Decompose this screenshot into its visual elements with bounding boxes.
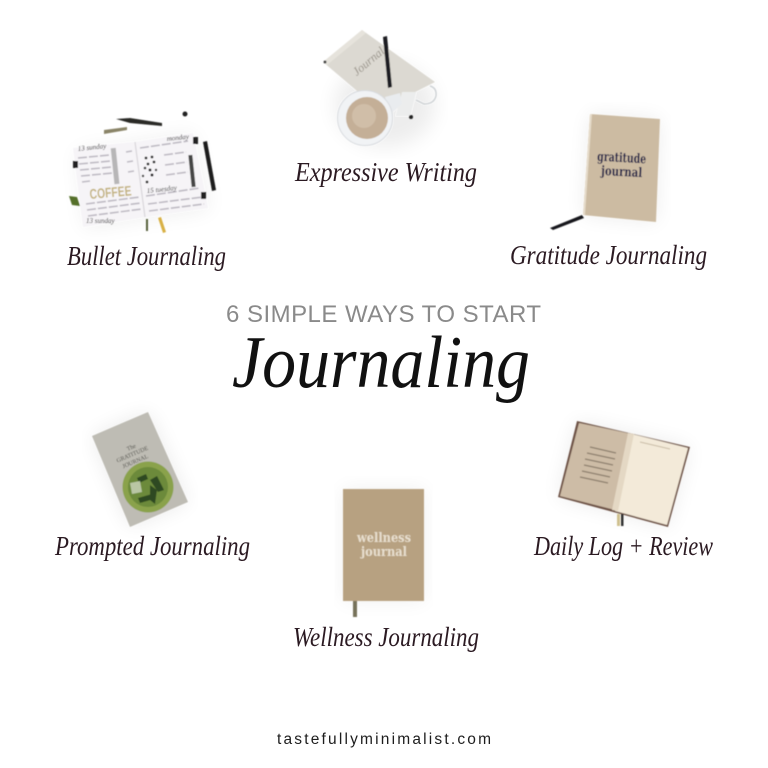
cover title: gratitude journal <box>597 150 647 181</box>
image: wellness journal <box>343 489 424 617</box>
cover title: wellness journal: wellness <box>356 531 411 546</box>
cover title: the gratitude journal: JOURNAL <box>122 454 150 470</box>
label: Gratitude Journaling: Gratitude Journaling <box>510 240 707 270</box>
image: daily log open book <box>558 421 690 527</box>
cover title: the gratitude journal <box>116 443 150 470</box>
cover title: gratitude journal: journal <box>600 164 643 181</box>
image: bullet journal <box>69 112 216 233</box>
image: expressive writing notebook and coffee cup <box>323 30 436 147</box>
image: gratitude journal <box>550 114 660 230</box>
heading: 6 simple ways to start: 6 SIMPLE WAYS TO START <box>226 301 541 328</box>
image: expressive writing notebook and coffee cup: Journal <box>350 43 388 79</box>
text: dated headings in journal: monday <box>166 133 190 143</box>
cover title: wellness journal: journal <box>360 545 407 560</box>
label: Daily Log + Review: Daily Log + Review <box>533 531 713 561</box>
footer: website: tastefullyminimalist.com <box>277 731 491 748</box>
text: dated headings in journal: 15 tuesday <box>146 184 178 195</box>
label: Bullet Journaling: Bullet Journaling <box>67 241 226 271</box>
text: dated headings in journal <box>77 133 190 225</box>
text: dated headings in journal: 13 sunday <box>77 142 108 153</box>
label: Wellness Journaling: Wellness Journaling <box>293 622 479 652</box>
label: Expressive Writing: Expressive Writing <box>294 157 477 187</box>
title: Journaling: Journaling <box>232 322 530 404</box>
cover title: gratitude journal: gratitude <box>597 150 647 167</box>
cover title: the gratitude journal: The <box>126 443 137 453</box>
text: dated headings in journal: 13 sunday <box>86 217 115 225</box>
cover title: wellness journal <box>356 531 411 560</box>
label: Prompted Journaling: Prompted Journaling <box>54 531 250 561</box>
text: coffee lettering: COFFEE <box>89 182 132 202</box>
cover title: the gratitude journal: GRATITUDE <box>116 446 150 464</box>
image: prompted journal with matcha <box>92 412 188 527</box>
